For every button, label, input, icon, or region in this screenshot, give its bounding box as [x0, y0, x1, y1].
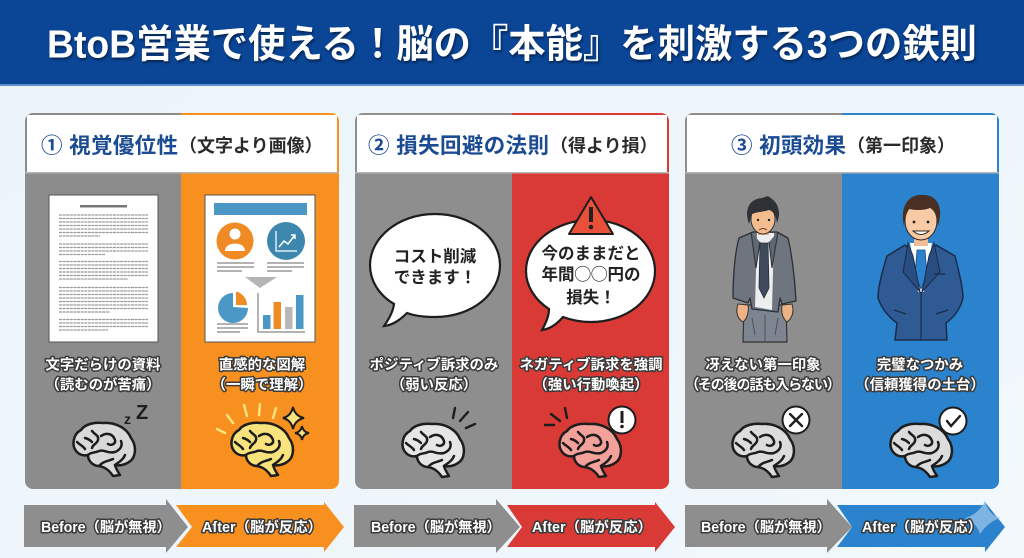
speech bubble: negative message with warning: 損失！ — [566, 288, 616, 307]
title banner — [0, 0, 1024, 86]
arrow: after — [176, 502, 344, 552]
title banner: BtoB営業で使える！脳の『本能』を刺激する3つの鉄則 — [47, 24, 977, 66]
caption: before — [45, 356, 161, 394]
icon: alert brain — [545, 406, 636, 477]
caption: before: （その後の話も入らない） — [685, 376, 841, 394]
caption: before: ポジティブ訴求のみ — [370, 356, 498, 374]
icon: sleeping brain — [74, 402, 148, 476]
caption: before: 冴えない第一印象 — [705, 356, 821, 374]
caption: after: （一瞬で理解） — [212, 376, 312, 394]
caption: after: ネガティブ訴求を強調 — [519, 356, 663, 374]
icon: warning triangle — [569, 197, 613, 234]
arrow row: panel 1 — [24, 499, 344, 553]
panel 3 heading — [731, 134, 955, 158]
panel 3 heading: （第一印象） — [847, 135, 955, 156]
arrow: after: After（脳が反応） — [532, 518, 652, 536]
speech bubble: negative message with warning: 今のままだと — [542, 243, 640, 263]
arrow: after — [837, 501, 1005, 552]
arrow: before: Before（脳が無視） — [371, 518, 501, 536]
caption: before: （読むのが苦痛） — [45, 376, 161, 394]
panel 1 background — [25, 113, 339, 489]
speech bubble: negative message with warning: 年間◯◯円の — [542, 264, 640, 284]
icon: sleeping brain: Z — [136, 402, 148, 424]
caption: after — [519, 356, 663, 394]
arrow: before: Before（脳が無視） — [701, 518, 831, 536]
speech bubble: positive message: できます！ — [394, 268, 476, 287]
arrow: after: After（脳が反応） — [862, 518, 982, 536]
arrow row: panel 2 — [354, 499, 675, 553]
panel 1 heading — [41, 134, 323, 158]
panel 2 heading — [368, 134, 658, 158]
caption: before — [685, 356, 841, 394]
arrow: after: After（脳が反応） — [202, 518, 322, 536]
arrow: before: Before（脳が無視） — [41, 518, 171, 536]
caption: after: 直感的な図解 — [219, 356, 305, 374]
icon: weak-reaction brain — [403, 408, 475, 477]
caption: after — [212, 356, 312, 394]
icon: sleeping brain: z — [124, 411, 131, 427]
speech bubble: positive message — [370, 214, 500, 326]
sparkle — [965, 501, 1000, 534]
caption: before: 文字だらけの資料 — [45, 356, 161, 374]
panel 1: visual dominance — [25, 113, 339, 489]
caption: after: （強い行動喚起） — [533, 376, 649, 394]
panel 3: primacy effect — [685, 113, 999, 489]
caption: after: 完璧なつかみ — [877, 356, 963, 374]
arrow: after — [507, 502, 675, 552]
panel 3 heading: ③ 初頭効果 — [731, 134, 846, 158]
panel 2 background — [355, 113, 669, 489]
caption: before — [370, 356, 498, 394]
caption: after: （信頼獲得の土台） — [855, 376, 985, 394]
panel 2: loss aversion — [355, 113, 669, 489]
caption: after — [855, 356, 985, 394]
panel 3 background — [685, 113, 999, 489]
icon: visual diagram document — [205, 195, 315, 342]
caption: before: （弱い反応） — [391, 376, 477, 394]
panel 1 heading: （文字より画像） — [179, 136, 323, 156]
icon: bright brain — [217, 404, 309, 476]
illustration: confident salesperson — [878, 195, 963, 340]
arrow row: panel 3 — [685, 499, 1005, 553]
panel 1 heading: ① 視覚優位性 — [41, 134, 178, 158]
speech bubble: negative message with warning — [526, 197, 655, 330]
arrow: before — [685, 499, 852, 553]
arrow: before — [354, 499, 520, 553]
icon: rejected brain — [733, 406, 810, 477]
panel 2 heading: （得より損） — [550, 136, 658, 156]
illustration: untidy salesperson — [733, 196, 796, 342]
arrow: before — [24, 499, 188, 553]
panel 2 heading: ② 損失回避の法則 — [368, 134, 549, 158]
speech bubble: positive message: コスト削減 — [394, 247, 477, 266]
icon: text-heavy document — [49, 195, 158, 342]
icon: accepted brain — [891, 408, 966, 477]
